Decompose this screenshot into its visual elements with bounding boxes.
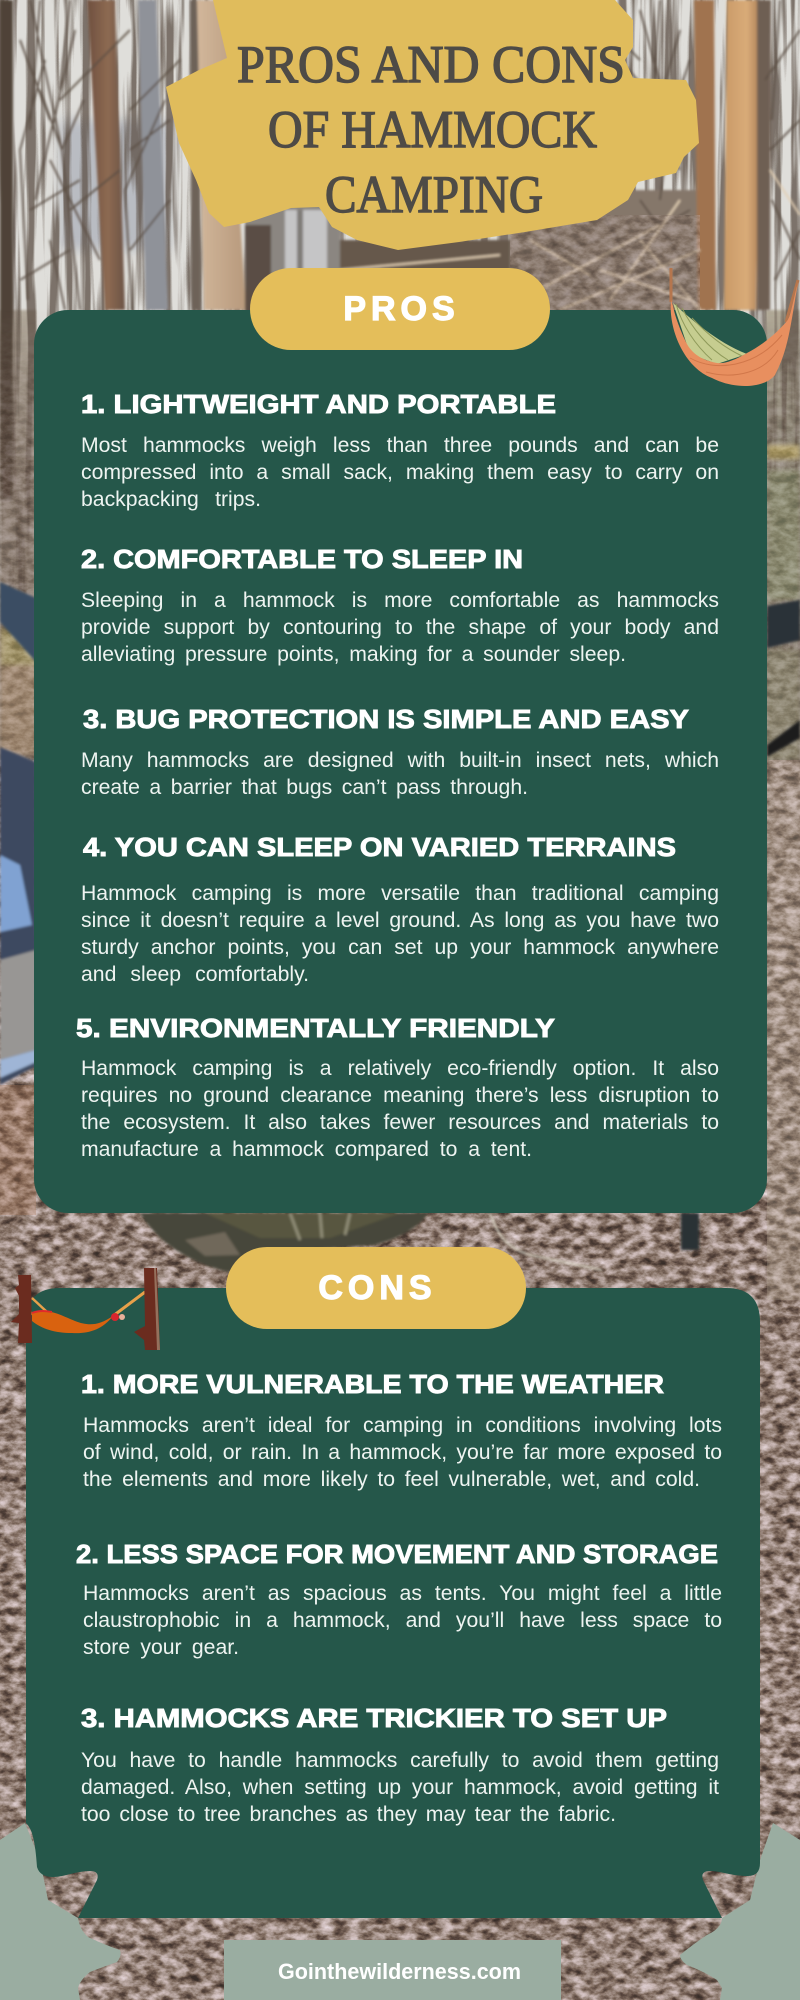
- text: environmentally friendly: the ecosystem. It also takes fewer resources and materials to: [81, 1111, 719, 1134]
- text: less space: [83, 1582, 722, 1659]
- hammock strap left: [0, 582, 36, 662]
- branches: [20, 0, 800, 310]
- text: varied terrains: Hammock camping is more versatile than traditional camping: [81, 882, 719, 904]
- text: trickier to set up: too close to tree branches as they may tear the fabric.: [81, 1803, 616, 1826]
- rope: [490, 1213, 602, 1270]
- text: less space: Hammocks aren’t as spacious as tents. You might feel a little: [83, 1582, 722, 1604]
- text: comfortable to sleep in: alleviating pressure points, making for a sounder sleep.: [81, 643, 626, 666]
- text: vulnerable to weather: of wind, cold, or rain. In a hammock, you’re far more exposed to: [83, 1441, 722, 1464]
- text: bug protection: [81, 748, 719, 799]
- side strips: [0, 310, 36, 770]
- left and right strips: [0, 445, 800, 760]
- heading: lightweight and portable: 1. LIGHTWEIGHT AND PORTABLE: [81, 389, 556, 419]
- text: environmentally friendly: manufacture a hammock compared to a tent.: [81, 1138, 532, 1161]
- text: comfortable to sleep in: provide support by contouring to the shape of your body and: [81, 616, 719, 639]
- leaf litter ground: [0, 760, 800, 2000]
- text: varied terrains: [81, 882, 719, 986]
- text: environmentally friendly: [81, 1056, 719, 1161]
- icon: orange and green hammock: [670, 268, 800, 386]
- text: lightweight and portable: Most hammocks weigh less than three pounds and can be: [81, 434, 719, 456]
- title: [237, 36, 625, 224]
- text: varied terrains: and sleep comfortably.: [81, 963, 309, 986]
- text: trickier to set up: You have to handle hammocks carefully to avoid them getting: [81, 1748, 719, 1772]
- text: varied terrains: sturdy anchor points, you can set up your hammock anywhere: [81, 936, 719, 959]
- text: vulnerable to weather: [83, 1414, 722, 1491]
- text: lightweight and portable: [81, 434, 719, 511]
- trunks: [0, 0, 13, 500]
- strap: [681, 1213, 699, 1250]
- icon: hammock between posts: [11, 1268, 160, 1350]
- panel: cons: [26, 1288, 760, 1918]
- title: OF HAMMOCK: [268, 101, 597, 159]
- text: bug protection: create a barrier that bugs can’t pass through.: [81, 776, 528, 799]
- text: lightweight and portable: compressed into a small sack, making them easy to carry on: [81, 461, 719, 484]
- title: CAMPING: [325, 166, 543, 224]
- text: varied terrains: since it doesn’t require a level ground. As long as you have two: [81, 909, 719, 932]
- title: PROS AND CONS: [237, 36, 625, 94]
- cons pill: [226, 1247, 526, 1329]
- panel: pros: [34, 310, 767, 1213]
- footer banner: [224, 1940, 561, 2000]
- text: vulnerable to weather: Hammocks aren’t ideal for camping in conditions involving lots: [83, 1414, 722, 1436]
- text: environmentally friendly: Hammock camping is a relatively eco-friendly option. It also: [81, 1056, 719, 1080]
- text: comfortable to sleep in: Sleeping in a hammock is more comfortable as hammocks: [81, 588, 719, 612]
- pros pill: [250, 268, 550, 350]
- heading: varied terrains: 4. YOU CAN SLEEP ON VARIED TERRAINS: [83, 832, 676, 862]
- hammock underside: [140, 1213, 428, 1272]
- text: less space: claustrophobic in a hammock, and you’ll have less space to: [83, 1609, 722, 1632]
- text: trickier to set up: damaged. Also, when setting up your hammock, avoid getting it: [81, 1776, 719, 1799]
- heading: bug protection: 3. BUG PROTECTION IS SIMPLE AND EASY: [83, 704, 689, 734]
- text: comfortable to sleep in: [81, 588, 719, 666]
- straps right: [767, 600, 800, 648]
- heading: comfortable to sleep in: 2. COMFORTABLE TO SLEEP IN: [81, 544, 523, 574]
- cons pill: CONS: [318, 1269, 437, 1307]
- tent left: [0, 747, 36, 1085]
- title brush shape: [166, 0, 699, 250]
- bottom right sage shape: [680, 1823, 800, 2000]
- panel shape: [26, 1288, 760, 1918]
- text: less space: store your gear.: [83, 1636, 239, 1659]
- text: bug protection: Many hammocks are designed with built-in insect nets, which: [81, 748, 719, 772]
- text: vulnerable to weather: the elements and more likely to feel vulnerable, wet, and cold.: [83, 1468, 700, 1491]
- text: trickier to set up: [81, 1748, 719, 1826]
- website text: Gointhewilderness.com: [278, 1959, 521, 1984]
- bottom left sage shape: [0, 1823, 120, 2000]
- heading: trickier to set up: 3. HAMMOCKS ARE TRICKIER TO SET UP: [81, 1703, 667, 1733]
- pros pill: PROS: [343, 290, 460, 328]
- heading: vulnerable to weather: 1. MORE VULNERABLE TO THE WEATHER: [81, 1369, 664, 1399]
- text: environmentally friendly: requires no ground clearance meaning there’s less disruption to: [81, 1084, 719, 1107]
- text: lightweight and portable: backpacking trips.: [81, 488, 261, 511]
- heading: less space: 2. LESS SPACE FOR MOVEMENT AND STORAGE: [76, 1539, 718, 1569]
- heading: environmentally friendly: 5. ENVIRONMENTALLY FRIENDLY: [76, 1013, 555, 1043]
